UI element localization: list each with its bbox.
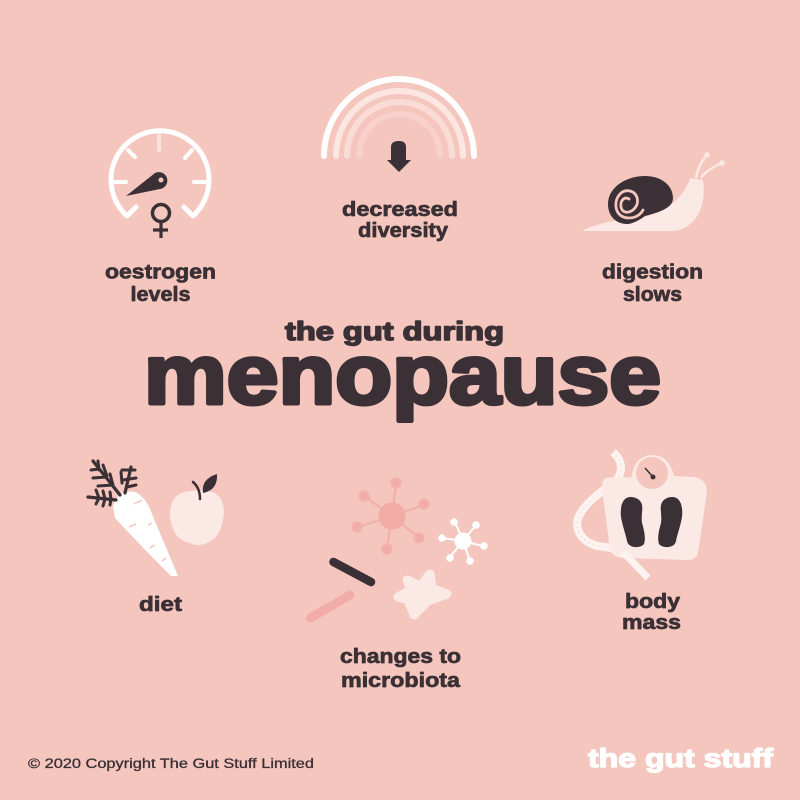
icon: oestrogen gauge (111, 131, 209, 238)
label: digestion slows: digestion (602, 262, 703, 284)
icon: snail (582, 152, 725, 231)
icon: carrot and apple (88, 461, 224, 576)
icon: microbiota cluster (310, 478, 487, 618)
label: diet: diet (139, 594, 182, 616)
label: body mass (622, 591, 681, 634)
label: body mass: mass (622, 612, 681, 634)
label: oestrogen levels: oestrogen (105, 262, 216, 284)
label: changes to microbiota: changes to (340, 646, 461, 668)
label: decreased diversity: decreased (342, 199, 458, 221)
label: digestion slows: slows (623, 284, 682, 306)
label: oestrogen levels: levels (130, 284, 190, 306)
label: oestrogen levels (105, 262, 216, 306)
label: digestion slows (602, 262, 703, 306)
title: the gut during: the gut during (285, 316, 504, 346)
label: changes to microbiota: microbiota (341, 670, 461, 692)
icon: scales with tape measure (577, 452, 707, 578)
label: changes to microbiota (340, 646, 461, 692)
label: decreased diversity: diversity (358, 220, 449, 242)
icon: rainbow with down arrow (324, 79, 474, 172)
label: body mass: body (625, 591, 681, 613)
label: decreased diversity (342, 199, 458, 242)
logo: the gut stuff: the gut stuff (588, 743, 773, 773)
copyright notice: © 2020 Copyright The Gut Stuff Limited (28, 756, 314, 771)
title: menopause: menopause (144, 328, 661, 422)
